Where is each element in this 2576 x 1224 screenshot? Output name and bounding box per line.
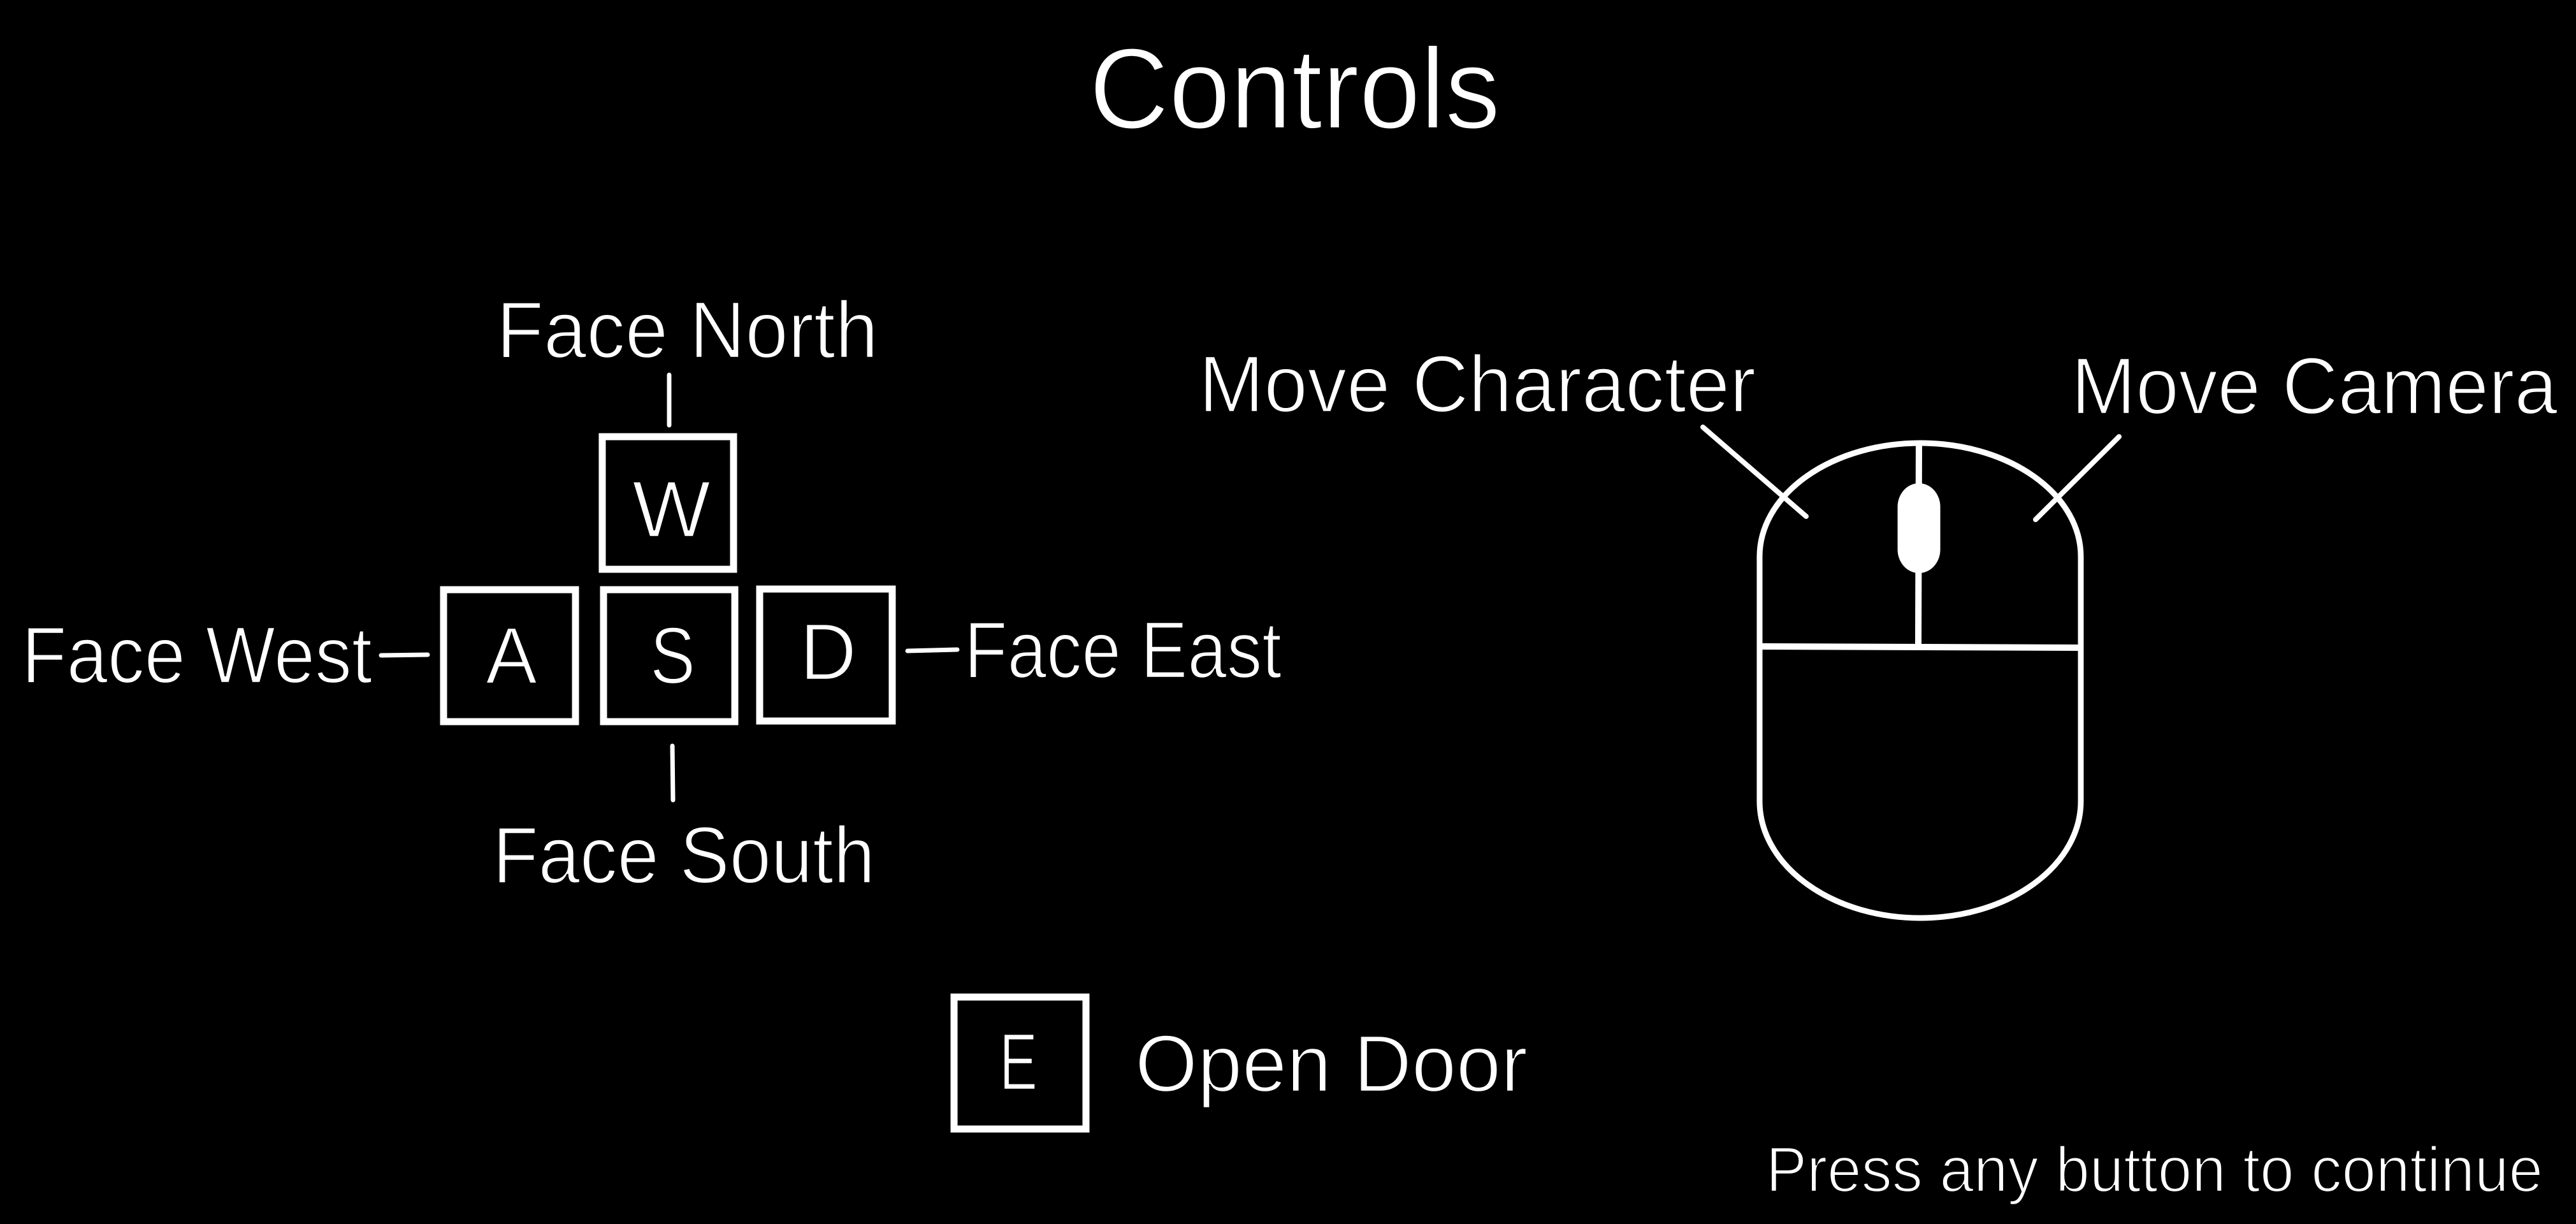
tick: east [908,650,957,651]
key: S [604,590,735,722]
pointer: left button [1703,427,1806,516]
label: Move Character: Move Character [1199,339,1756,429]
title: Controls [1089,25,1500,153]
key: S: S [650,611,695,701]
label: Face East: Face East [964,605,1282,695]
icon: mouse [1760,443,2081,918]
key: W: W [632,464,711,554]
key: A [444,590,575,722]
key: D: D [800,607,857,697]
label: Open Door: Open Door [1135,1019,1528,1109]
tick: south [672,746,673,800]
mouse control cluster [1199,339,2558,918]
label: Face West: Face West [22,610,372,700]
label: Move Camera: Move Camera [2071,341,2558,431]
key: W [602,437,734,569]
label: Face South: Face South [493,810,875,900]
WASD control cluster [22,285,1282,900]
key: A: A [486,611,537,701]
door control [954,997,1528,1129]
key: D [760,589,892,721]
label: Face North: Face North [496,285,878,375]
key: E [954,997,1086,1129]
pointer: right button [2036,437,2119,520]
continue prompt: Press any button to continue [1766,1134,2543,1206]
tick: north [667,375,672,425]
key: E: E [999,1017,1038,1107]
